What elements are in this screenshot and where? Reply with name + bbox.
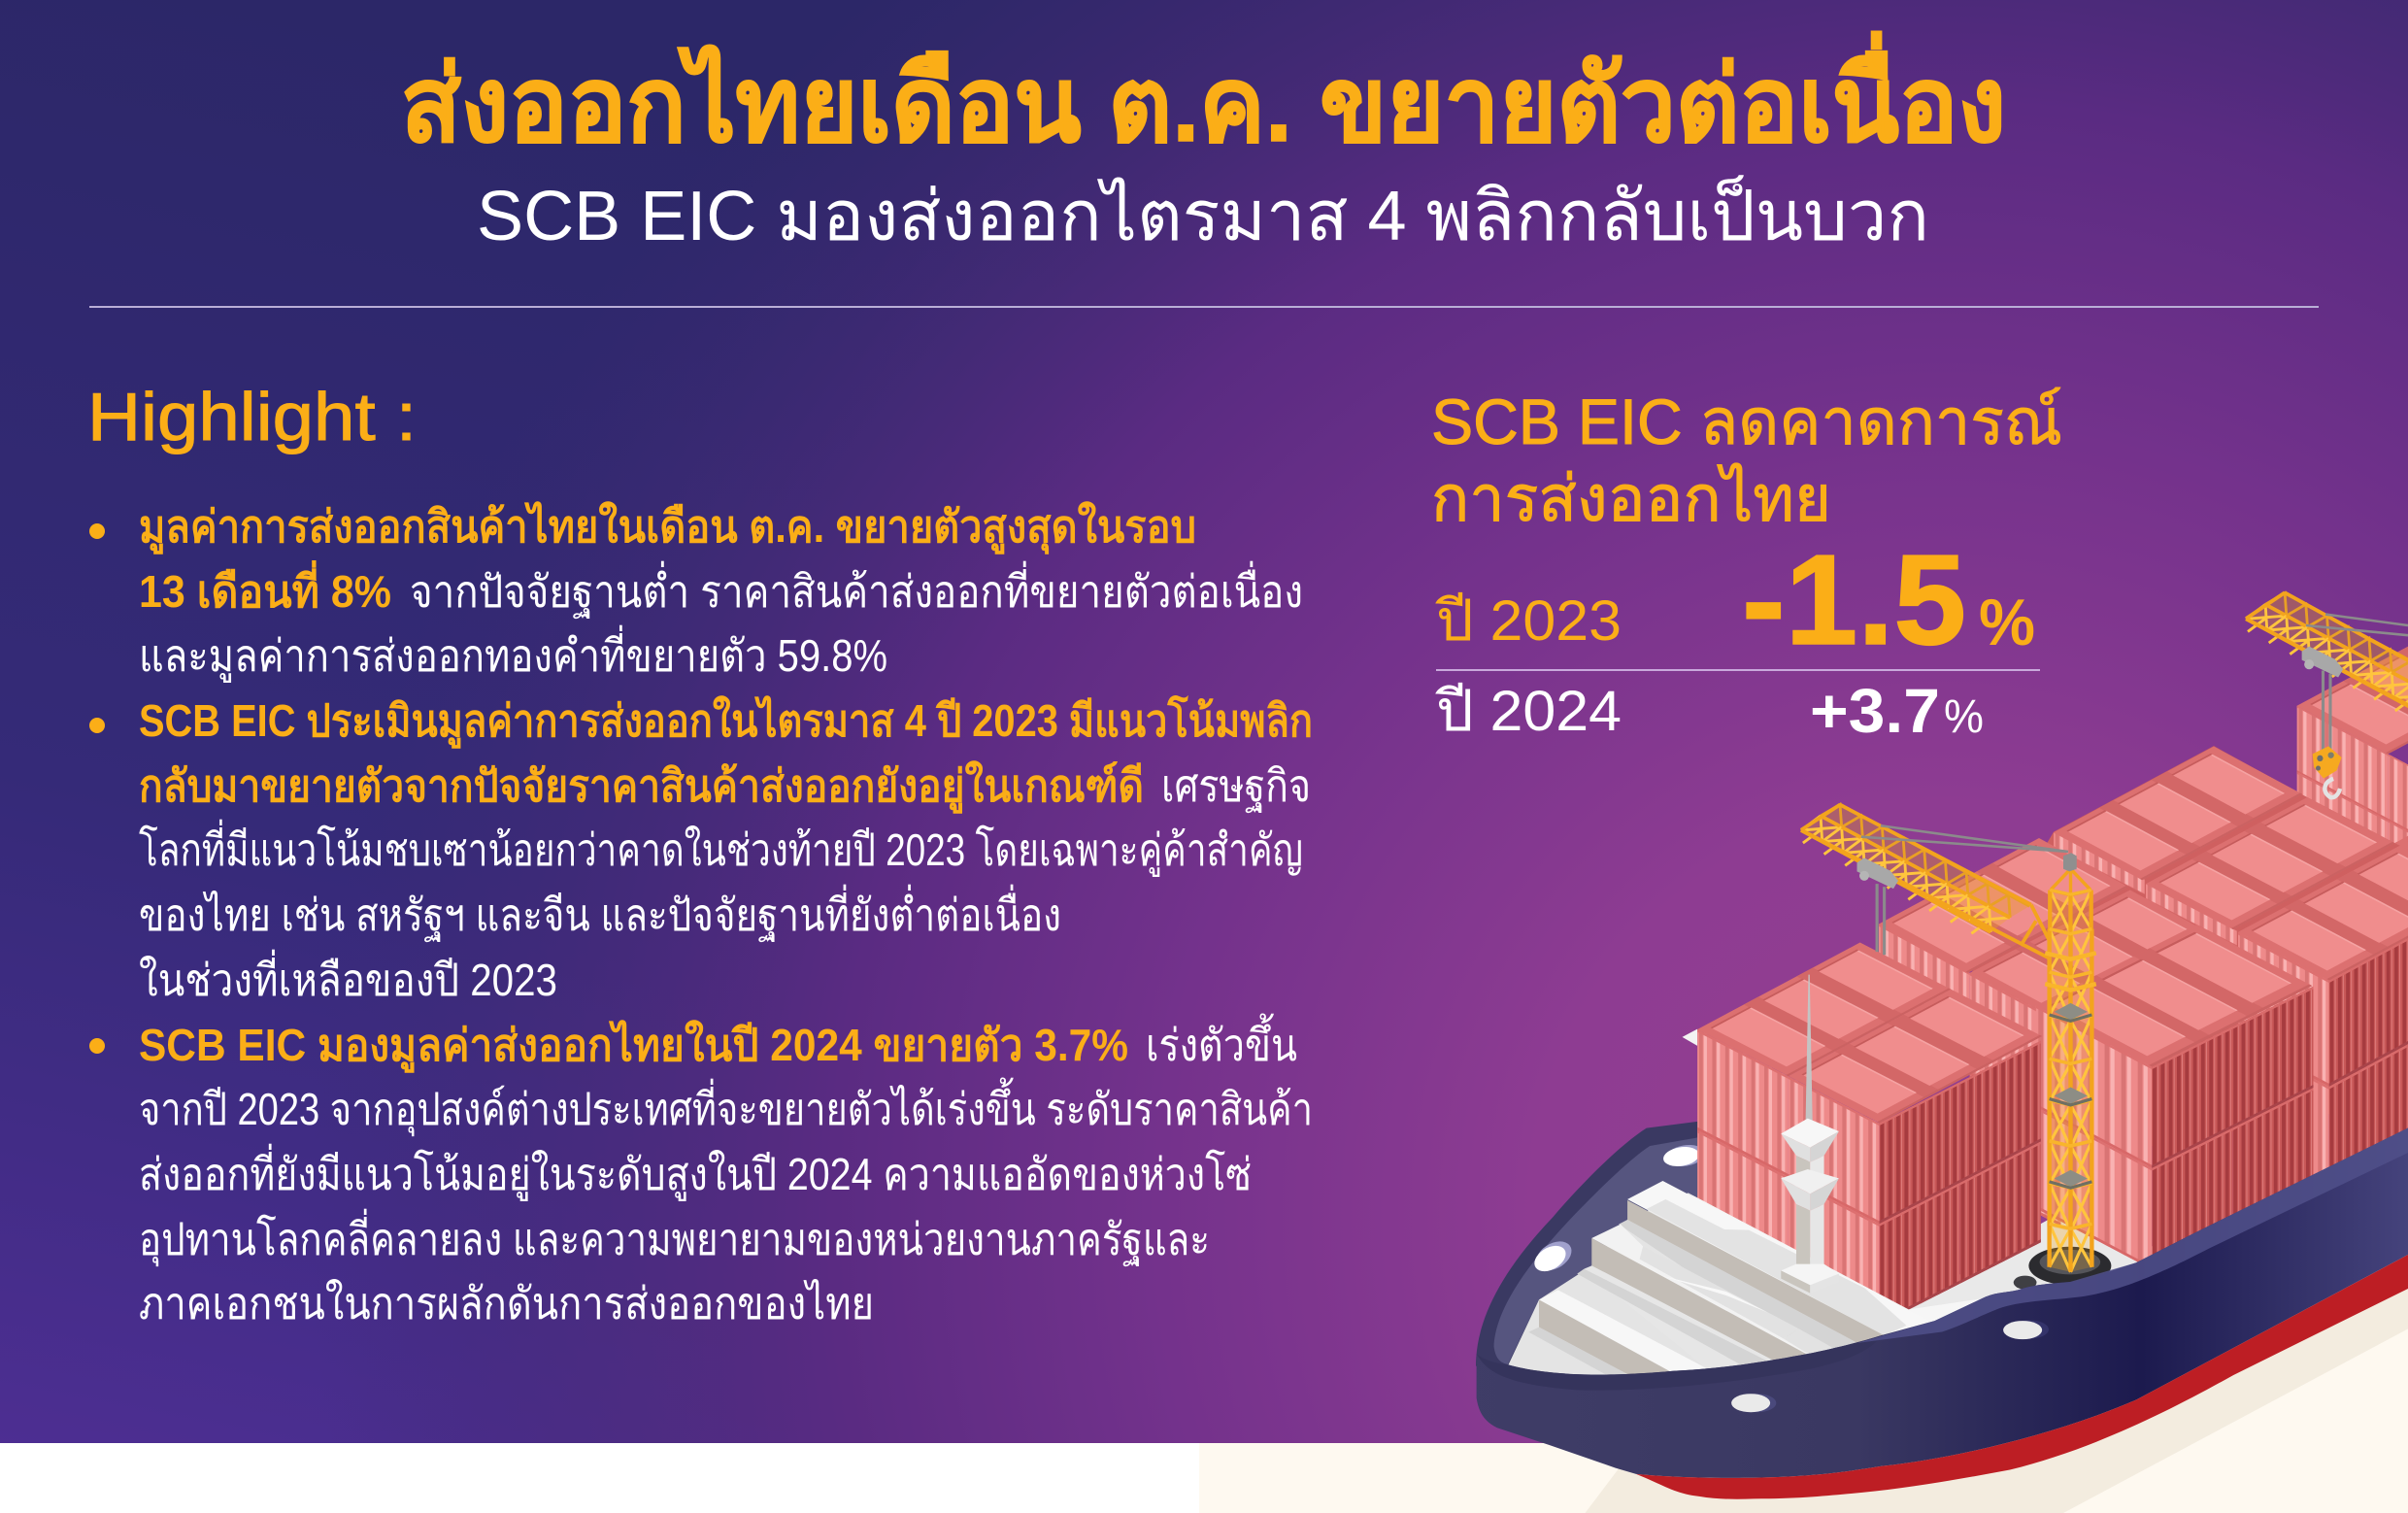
front centre container stack [2036, 925, 2313, 1269]
deck floor [1882, 1211, 2155, 1335]
bullet point 2: กลับมาขยายตัวจากปัจจัยราคาสินค้าส่งออกยังอยู่ในเกณฑ์ดี [139, 759, 1144, 814]
forecast heading: การส่งออกไทย [1431, 462, 1831, 534]
title: ส่งออกไทยเดือน ต.ค. ขยายตัวต่อเนื่อง [401, 31, 2006, 163]
highlight list [89, 500, 1313, 1328]
crane rear [2246, 592, 2408, 797]
illustration: container ship [1476, 592, 2408, 1513]
bullet point 3: อุปทานโลกคลี่คลายลง และความพยายามของหน่วยงานภาครัฐและ [139, 1208, 1210, 1267]
bullet point 1: จากปัจจัยฐานต่ำ ราคาสินค้าส่งออกที่ขยายตัวต่อเนื่อง [410, 560, 1303, 619]
forecast row 2024: ปี 2024 [1435, 680, 1622, 743]
forecast row 2024 [1435, 676, 1984, 746]
forecast panel [1431, 386, 2062, 746]
forecast row 2024: +3.7 [1810, 676, 1940, 746]
bullet point 2: โลกที่มีแนวโน้มชบเซาน้อยกว่าคาดในช่วงท้ายปี 2023 โดยเฉพาะคู่ค้าสำคัญ [139, 819, 1303, 877]
sea and shadow [1548, 1161, 2408, 1513]
hull red stripe [1636, 1255, 2408, 1499]
middle container stacks [1879, 747, 2408, 1227]
forecast heading: SCB EIC ลดคาดการณ์ [1431, 386, 2062, 457]
forecast heading [1431, 386, 2062, 534]
bullet point 3: จากปี 2023 จากอุปสงค์ต่างประเทศที่จะขยายตัวได้เร่งขึ้น ระดับราคาสินค้า [139, 1077, 1313, 1137]
mast tower [1781, 975, 1839, 1294]
front left container stack [1682, 943, 2042, 1325]
bullet point 3: ส่งออกที่ยังมีแนวโน้มอยู่ในระดับสูงในปี 2024 ความแออัดของห่วงโซ่ [139, 1143, 1252, 1201]
bullet point 2: SCB EIC ประเมินมูลค่าการส่งออกในไตรมาส 4 ปี 2023 มีแนวโน้มพลิก [139, 694, 1313, 749]
bullet point 1: มูลค่าการส่งออกสินค้าไทยในเดือน ต.ค. ขยายตัวสูงสุดในรอบ [139, 500, 1196, 555]
bullet point 1: 13 เดือนที่ 8% [139, 560, 391, 617]
hull [1477, 1127, 2408, 1499]
forecast row 2023 [1435, 528, 2035, 671]
bullet point 3 [89, 1013, 1313, 1328]
forecast row 2023: ปี 2023 [1435, 589, 1622, 653]
subtitle: SCB EIC มองส่งออกไตรมาส 4 พลิกกลับเป็นบวก [477, 175, 1929, 255]
bow rim [1476, 1120, 1709, 1386]
forecast row 2023: -1.5 [1742, 528, 1966, 671]
bullet point 2: ของไทย เช่น สหรัฐฯ และจีน และปัจจัยฐานที่ยังต่ำต่อเนื่อง [139, 884, 1061, 942]
portholes [1731, 1320, 2049, 1412]
forecast row 2023: % [1979, 586, 2035, 659]
bullet point 2 [89, 694, 1313, 1005]
bullet point 2: ในช่วงที่เหลือของปี 2023 [139, 949, 557, 1005]
heading: Highlight: Highlight : [87, 379, 417, 454]
rear container stack [2297, 620, 2408, 935]
crane front [1801, 804, 2111, 1290]
bullet point 2: เศรษฐกิจ [1161, 760, 1311, 813]
bullet point 3: ภาคเอกชนในการผลักดันการส่งออกของไทย [139, 1278, 874, 1328]
deck and steps [1508, 1181, 1987, 1382]
bullet point 1 [89, 500, 1303, 683]
bullet point 3: SCB EIC มองมูลค่าส่งออกไทยในปี 2024 ขยายตัว 3.7% [139, 1019, 1128, 1073]
bullet point 1: และมูลค่าการส่งออกทองคำที่ขยายตัว 59.8% [139, 624, 887, 683]
bullet point 3: เร่งตัวขึ้น [1146, 1013, 1297, 1070]
forecast row 2024: % [1944, 691, 1984, 743]
